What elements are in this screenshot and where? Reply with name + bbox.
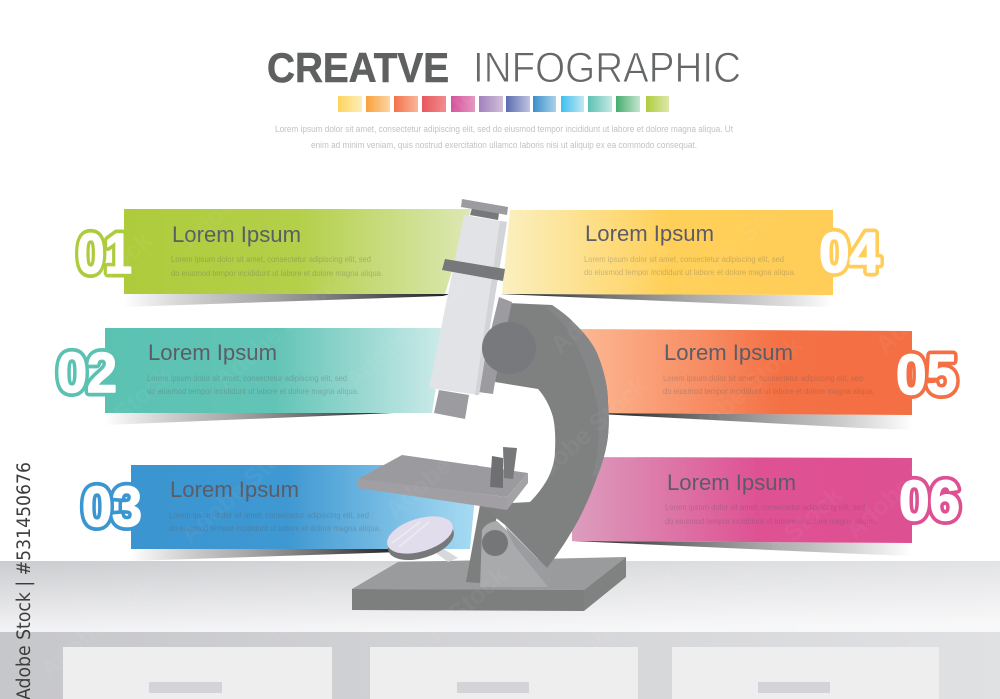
watermark: repeated stock text: Adobe Stock bbox=[545, 236, 678, 359]
watermark: repeated stock text: Adobe Stock bbox=[370, 61, 503, 184]
watermark: repeated stock text: Adobe Stock bbox=[340, 271, 473, 394]
panel: 06 pink: Lorem ipsum dolor sit amet, consectetur adipiscing elit, sed bbox=[665, 502, 865, 512]
intro paragraph: enim ad minim veniam, quis nostrud exercitation ullamco laboris nisi ut aliquip ex ea commodo consequat. bbox=[311, 140, 697, 150]
panel: 04 yellow: Lorem Ipsum bbox=[585, 221, 714, 246]
panel: 02 teal: Lorem ipsum dolor sit amet, consectetur adipiscing elit, sed bbox=[147, 373, 347, 383]
watermark: repeated stock text: Adobe Stock bbox=[45, 51, 178, 174]
watermark: repeated stock text: Adobe Stock bbox=[520, 371, 653, 494]
panel: 04 yellow: 04 bbox=[819, 221, 880, 285]
panel: 06 pink: do eiusmod tempor incididunt ut labore et dolore magna aliqua. bbox=[665, 516, 877, 526]
stock id label: Adobe Stock | #531450676 bbox=[14, 462, 35, 699]
panel: 05 orange: 05 bbox=[896, 343, 957, 407]
title: CREATVE bbox=[267, 44, 449, 91]
watermark: repeated stock text: Adobe Stock bbox=[705, 61, 838, 184]
panel: 05 orange bbox=[575, 329, 957, 430]
watermark: repeated stock text: Adobe Stock bbox=[840, 421, 973, 544]
watermark: repeated stock text: Adobe Stock bbox=[505, 106, 638, 229]
intro paragraph bbox=[275, 124, 733, 150]
watermark: repeated stock text: Adobe Stock bbox=[670, 181, 803, 304]
watermark: repeated stock text: Adobe Stock bbox=[380, 401, 513, 524]
objective lens bbox=[434, 390, 469, 419]
panel: 04 yellow bbox=[500, 210, 880, 307]
watermark: repeated stock text: Adobe Stock bbox=[45, 361, 178, 484]
watermark: repeated stock text: Adobe Stock bbox=[840, 106, 973, 229]
panel: 06 pink: Lorem Ipsum bbox=[667, 470, 796, 495]
panel: 02 teal: 02 bbox=[57, 341, 117, 405]
panel: 06 pink: 06 bbox=[899, 469, 960, 533]
watermark: repeated stock text: Adobe Stock bbox=[175, 426, 308, 549]
panel: 05 orange: 05 bbox=[896, 343, 957, 407]
panel: 01 green: 01 bbox=[77, 222, 132, 286]
watermark: repeated stock text: Adobe Stock bbox=[675, 331, 808, 454]
watermark: repeated stock text: Adobe Stock bbox=[175, 131, 308, 254]
panel: 04 yellow: Lorem ipsum dolor sit amet, consectetur adipiscing elit, sed bbox=[584, 254, 784, 264]
watermark: repeated stock text: Adobe Stock bbox=[220, 561, 353, 684]
panel: 03 blue: 03 bbox=[82, 475, 142, 539]
panel: 01 green bbox=[77, 209, 471, 307]
panel: 02 teal: Lorem Ipsum bbox=[148, 340, 277, 365]
panel: 06 pink: 06 bbox=[899, 469, 960, 533]
title: INFOGRAPHIC bbox=[473, 44, 741, 92]
watermark: repeated stock text: Adobe Stock bbox=[25, 226, 158, 349]
panel: 02 teal bbox=[57, 328, 445, 425]
panel: 02 teal: do eiusmod tempor incididunt ut labore et dolore magna aliqua. bbox=[147, 386, 359, 396]
panel: 05 orange: Lorem ipsum dolor sit amet, consectetur adipiscing elit, sed bbox=[663, 373, 863, 383]
microscope curved arm bbox=[466, 297, 609, 583]
panel: 05 orange: do eiusmod tempor incididunt ut labore et dolore magna aliqua. bbox=[663, 386, 875, 396]
table and drawers bbox=[0, 561, 1000, 699]
panel: 01 green: 01 bbox=[77, 222, 132, 286]
panel: 06 pink bbox=[572, 457, 960, 556]
panel: 03 blue: Lorem ipsum dolor sit amet, consectetur adipiscing elit, sed bbox=[169, 510, 369, 520]
watermark: repeated stock text: Adobe Stock bbox=[870, 236, 1000, 359]
microscope tube bbox=[429, 199, 508, 395]
microscope base bbox=[352, 557, 626, 611]
watermark: repeated stock text: Adobe Stock bbox=[550, 561, 683, 684]
panel: 03 blue: do eiusmod tempor incididunt ut labore et dolore magna aliqua. bbox=[169, 523, 381, 533]
panel: 03 blue: Lorem Ipsum bbox=[170, 477, 299, 502]
panel: 01 green: do eiusmod tempor incididunt ut labore et dolore magna aliqua. bbox=[171, 268, 383, 278]
panel: 01 green: Lorem Ipsum bbox=[172, 222, 301, 247]
microscope illustration bbox=[352, 199, 626, 611]
mirror bbox=[383, 509, 458, 567]
microscope stage and clips bbox=[358, 447, 528, 510]
microscope lower bracket and small knob bbox=[480, 521, 552, 587]
intro paragraph: Lorem ipsum dolor sit amet, consectetur adipiscing elit, sed do eiusmod tempor incididunt ut labore et dolore magna aliqua. Ut bbox=[275, 124, 733, 134]
panel: 02 teal: 02 bbox=[57, 341, 117, 405]
panel: 04 yellow: do eiusmod tempor incididunt ut labore et dolore magna aliqua. bbox=[584, 267, 796, 277]
watermark: repeated stock text: Adobe Stock bbox=[715, 481, 848, 604]
panel: 01 green: Lorem ipsum dolor sit amet, consectetur adipiscing elit, sed bbox=[171, 254, 371, 264]
title bbox=[267, 44, 741, 92]
focus knob large bbox=[482, 322, 536, 374]
watermark: repeated stock text: Adobe Stock bbox=[210, 271, 343, 394]
watermark: repeated stock text: Adobe Stock bbox=[380, 561, 513, 684]
watermark: repeated stock text: Adobe Stock bbox=[35, 561, 168, 684]
panel: 05 orange: Lorem Ipsum bbox=[664, 340, 793, 365]
colour swatch strip bbox=[338, 96, 669, 112]
panel: 03 blue: 03 bbox=[82, 475, 142, 539]
panel: 04 yellow: 04 bbox=[819, 221, 880, 285]
panel: 03 blue bbox=[82, 465, 478, 561]
